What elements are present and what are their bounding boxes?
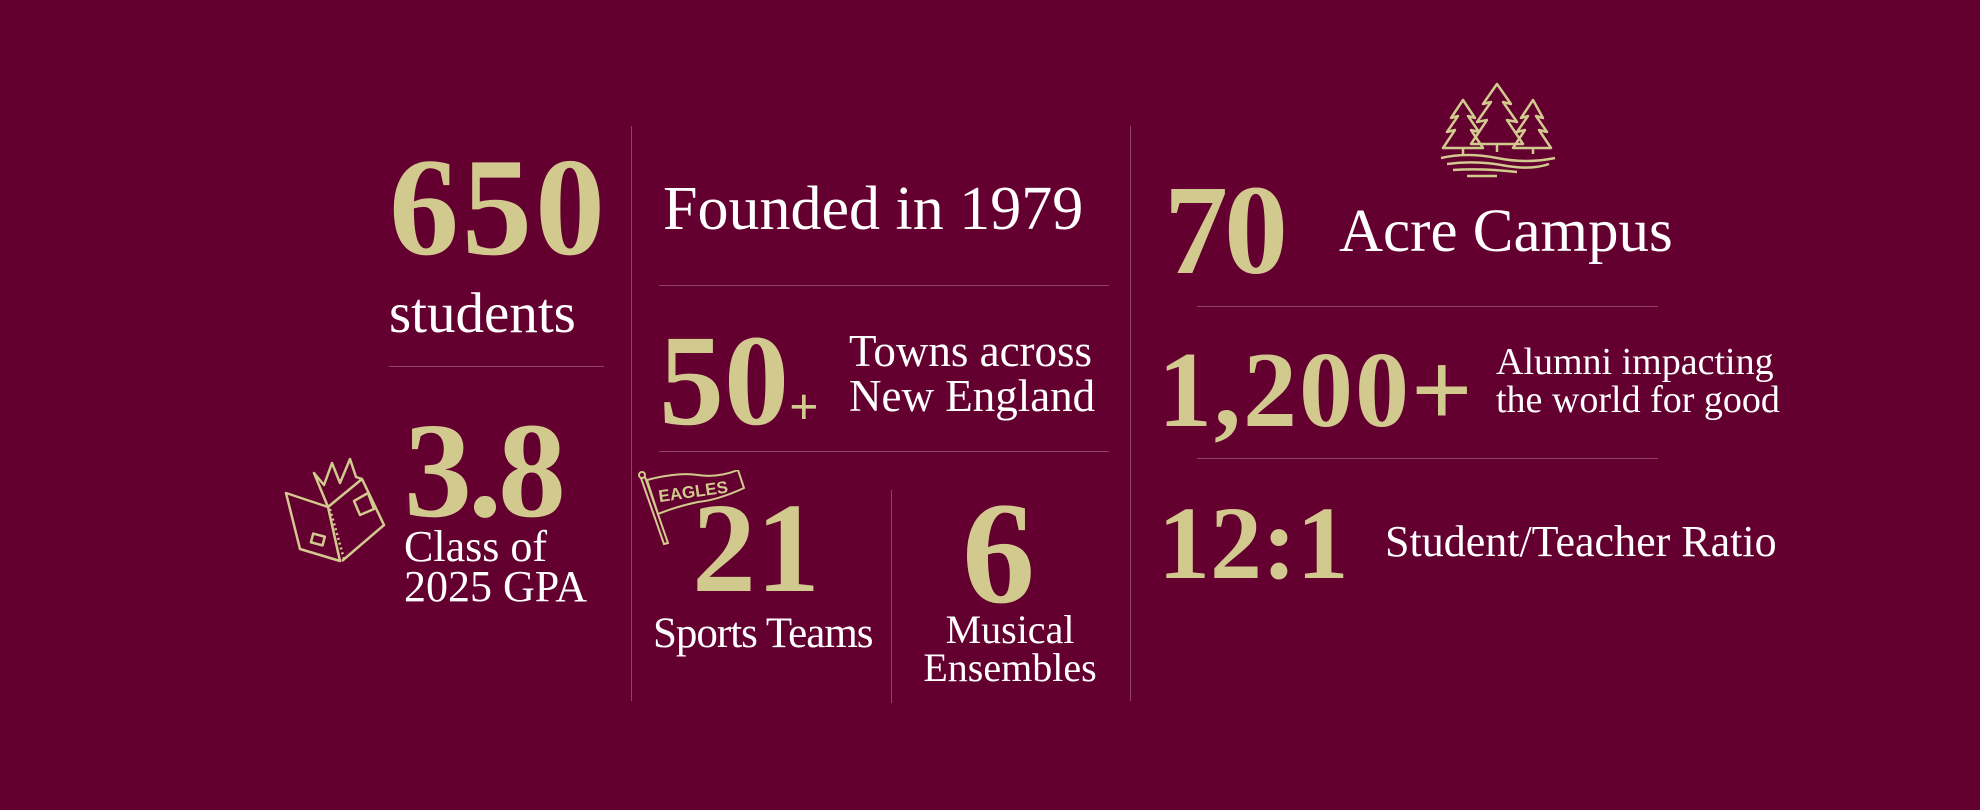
stat: 650 students	[389, 130, 608, 345]
label Class of 2025 GPA: Class of	[404, 522, 547, 571]
stat: 1,200+ alumni	[1158, 331, 1780, 450]
label towns: Towns across	[849, 326, 1092, 376]
number 650: 650	[389, 130, 608, 285]
label towns: New England	[849, 371, 1095, 421]
stat: 6 musical ensembles	[923, 472, 1097, 690]
label Acre Campus: Acre Campus	[1339, 198, 1673, 265]
icon: trees	[1440, 82, 1556, 178]
label alumni	[1496, 341, 1780, 421]
label alumni: Alumni impacting	[1496, 341, 1774, 383]
label Student/Teacher Ratio: Student/Teacher Ratio	[1385, 517, 1777, 566]
number 50+: 50+	[659, 309, 819, 453]
number 6: 6	[962, 472, 1035, 634]
number 21: 21	[692, 477, 820, 619]
label students: students	[389, 282, 576, 345]
label Sports Teams: Sports Teams	[653, 610, 873, 657]
label Class of 2025 GPA	[404, 522, 587, 611]
stat: 3.8 GPA	[404, 396, 587, 611]
stat: 50+ towns	[659, 309, 1095, 453]
heading: Founded in 1979: Founded in 1979	[663, 175, 1083, 243]
label Musical Ensembles: Ensembles	[923, 645, 1097, 690]
number 3.8: 3.8	[404, 396, 562, 546]
label Musical Ensembles	[923, 607, 1097, 690]
number 1,200+: 1,200+	[1158, 331, 1475, 450]
icon: Eagles pennant: EAGLES	[657, 478, 729, 506]
stat: 21 sports teams	[653, 477, 873, 657]
number 70: 70	[1164, 159, 1284, 301]
stat: 70 acre campus	[1164, 159, 1673, 301]
number 12:1: 12:1	[1158, 486, 1349, 601]
stat: 12:1 ratio	[1158, 486, 1777, 601]
icon: Eagles pennant	[638, 470, 746, 546]
label Musical Ensembles: Musical	[946, 607, 1074, 652]
label alumni: the world for good	[1496, 379, 1780, 421]
icon: book	[284, 458, 386, 562]
label Class of 2025 GPA: 2025 GPA	[404, 562, 587, 611]
label towns	[849, 326, 1095, 421]
